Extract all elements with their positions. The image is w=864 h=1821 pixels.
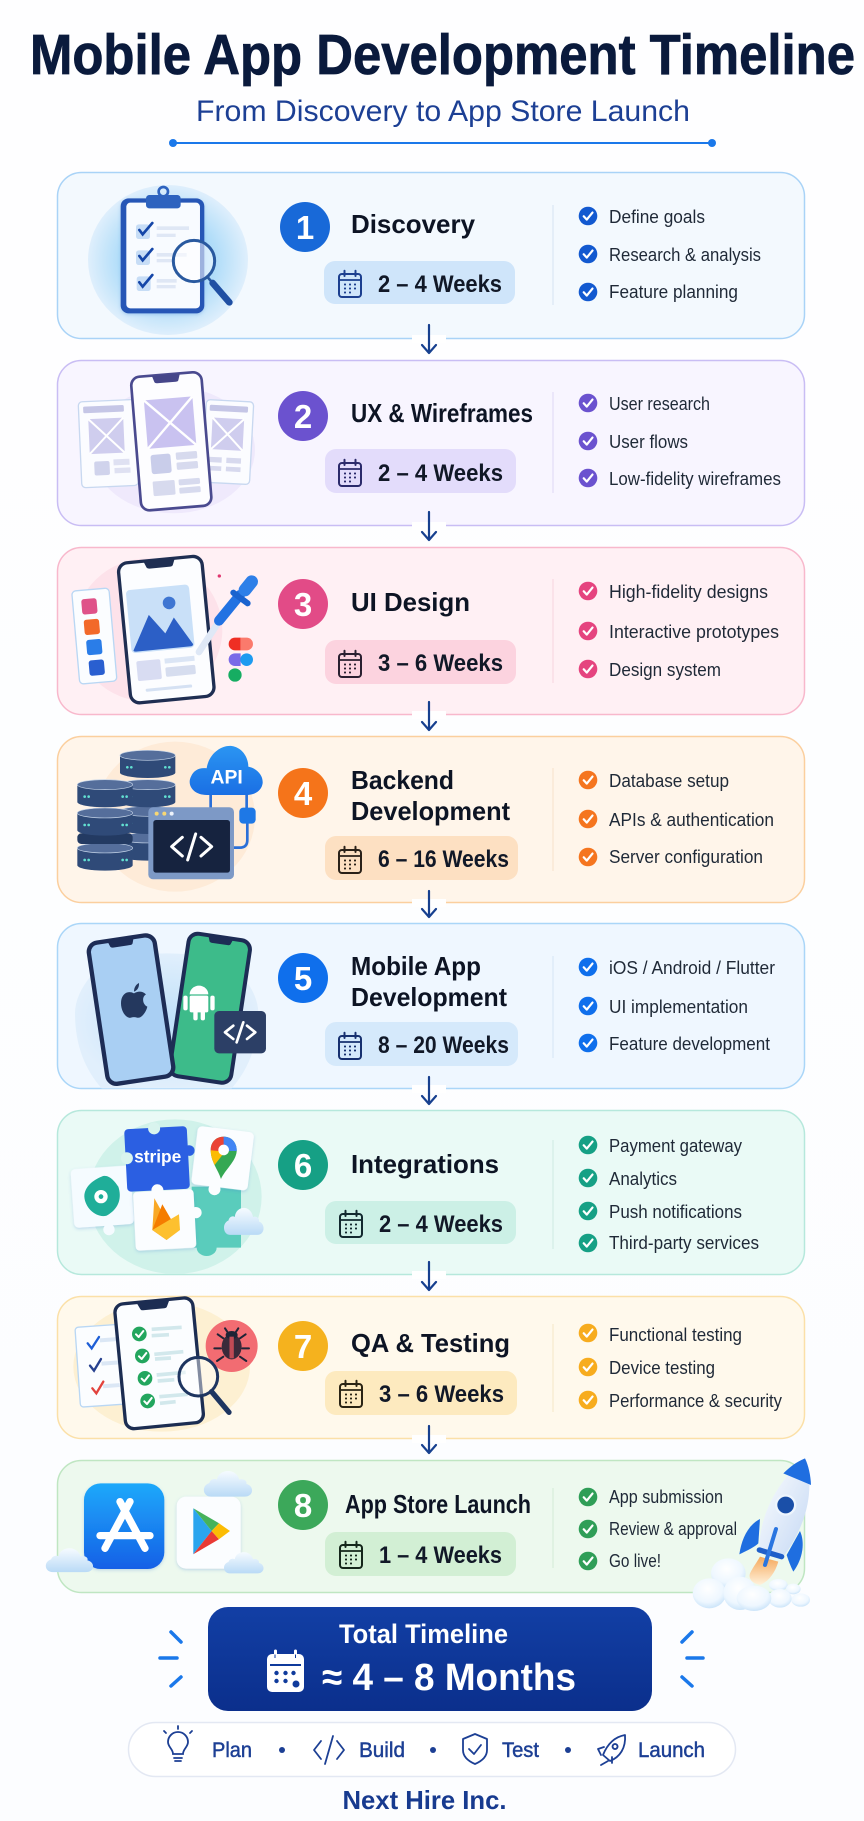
checklist: Go live! xyxy=(609,1551,661,1571)
arrow xyxy=(412,891,446,917)
panel: ux and wireframes xyxy=(58,360,804,526)
step title xyxy=(351,951,507,1012)
step title: Backend xyxy=(351,765,454,795)
panel: backend development xyxy=(58,736,804,902)
duration pill: 1 – 4 Weeks xyxy=(379,1542,502,1569)
panel: qa and testing xyxy=(58,1296,804,1438)
checklist: Performance & security xyxy=(609,1391,782,1411)
arrow xyxy=(412,1077,446,1104)
icon: wireframe phone and screens xyxy=(78,372,255,513)
label: launch: Launch xyxy=(638,1739,705,1762)
checklist: User flows xyxy=(609,432,688,452)
panel: ui design xyxy=(58,548,804,714)
checklist: App submission xyxy=(609,1487,723,1507)
duration pill: 2 – 4 Weeks xyxy=(378,460,503,487)
step title: UI Design xyxy=(351,587,470,617)
step number 7 xyxy=(278,1321,328,1371)
step title: Development xyxy=(351,982,507,1012)
checklist xyxy=(579,394,781,489)
company name: Next Hire Inc. xyxy=(342,1785,506,1815)
checklist xyxy=(579,207,761,302)
icon: qa phone and bug xyxy=(73,1297,258,1432)
duration pill xyxy=(325,1022,518,1066)
step number 8 xyxy=(278,1480,328,1530)
icon: white calendar xyxy=(267,1651,304,1692)
subtitle: From Discovery to App Store Launch xyxy=(196,95,690,128)
duration pill: 2 – 4 Weeks xyxy=(378,271,502,298)
checklist: Define goals xyxy=(609,207,705,227)
panel: integrations xyxy=(58,1110,804,1274)
arrow xyxy=(412,325,446,353)
step number 2: 2 xyxy=(294,398,312,435)
footer phases pill xyxy=(128,1722,736,1776)
icon: code xyxy=(314,1736,344,1764)
total timeline banner: ≈ 4 – 8 Months xyxy=(322,1657,576,1699)
icon: databases and api cloud xyxy=(77,742,263,892)
step number 1 xyxy=(280,202,330,252)
step title: Mobile App xyxy=(351,951,481,981)
checklist: Feature development xyxy=(609,1034,770,1054)
arrow xyxy=(412,1426,446,1453)
checklist: Review & approval xyxy=(609,1519,737,1539)
step number 6: 6 xyxy=(294,1147,312,1184)
step number 6 xyxy=(278,1140,328,1190)
step title: Integrations xyxy=(351,1149,499,1179)
step number 5 xyxy=(278,953,328,1003)
icon: lightbulb xyxy=(164,1726,192,1761)
decorative rays xyxy=(160,1632,703,1686)
step number 2 xyxy=(278,391,328,441)
checklist: Research & analysis xyxy=(609,245,761,265)
label: test: Test xyxy=(502,1739,539,1762)
step number 4 xyxy=(278,768,328,818)
step title: App Store Launch xyxy=(345,1489,531,1519)
icon: app store and play store xyxy=(46,1471,264,1573)
icon: ui design phone xyxy=(72,556,253,704)
step title: Development xyxy=(351,796,510,826)
duration pill xyxy=(324,261,515,304)
step number 1: 1 xyxy=(296,209,314,246)
checklist xyxy=(579,958,775,1054)
checklist: Analytics xyxy=(609,1169,677,1189)
checklist: Design system xyxy=(609,660,721,680)
checklist xyxy=(579,582,779,680)
checklist xyxy=(579,771,774,867)
icon: clipboard with magnifier xyxy=(88,185,248,335)
duration pill: 6 – 16 Weeks xyxy=(378,846,509,873)
arrow xyxy=(412,512,446,540)
checklist: Feature planning xyxy=(609,282,738,302)
checklist: Third-party services xyxy=(609,1233,759,1253)
step number 3 xyxy=(278,579,328,629)
label: plan: Plan xyxy=(212,1739,252,1762)
step number 3: 3 xyxy=(294,586,312,623)
duration pill xyxy=(325,449,516,493)
checklist: APIs & authentication xyxy=(609,810,774,830)
total timeline banner xyxy=(208,1607,652,1711)
checklist xyxy=(579,1136,759,1253)
duration pill xyxy=(325,1201,516,1244)
step title: UX & Wireframes xyxy=(351,398,533,428)
label: build: Build xyxy=(359,1739,405,1762)
checklist: iOS / Android / Flutter xyxy=(609,958,775,978)
icon: shield xyxy=(463,1734,487,1764)
duration pill xyxy=(325,1532,516,1576)
checklist: Push notifications xyxy=(609,1202,742,1222)
checklist: Interactive prototypes xyxy=(609,622,779,642)
step number 4: 4 xyxy=(294,775,313,812)
icon: integration puzzle pieces xyxy=(70,1119,264,1274)
panel: discovery xyxy=(58,172,804,338)
panel: app store launch xyxy=(46,1460,805,1592)
checklist: UI implementation xyxy=(609,997,748,1017)
icon: databases and api cloud: API xyxy=(211,767,243,788)
duration pill xyxy=(325,640,516,684)
icon: integration puzzle pieces: stripe xyxy=(134,1146,182,1166)
step number 8: 8 xyxy=(294,1487,312,1524)
checklist: Server configuration xyxy=(609,847,763,867)
duration pill: 2 – 4 Weeks xyxy=(379,1211,503,1238)
step number 5: 5 xyxy=(294,960,312,997)
arrow xyxy=(412,702,446,730)
checklist: Functional testing xyxy=(609,1325,742,1345)
title underline xyxy=(169,139,716,147)
duration pill: 3 – 6 Weeks xyxy=(378,650,503,677)
step title: QA & Testing xyxy=(351,1328,510,1358)
icon: ios and android phones xyxy=(75,932,266,1088)
checklist: Device testing xyxy=(609,1358,715,1378)
checklist: User research xyxy=(609,394,710,414)
arrow xyxy=(412,1262,446,1290)
checklist: Payment gateway xyxy=(609,1136,742,1156)
step title xyxy=(351,765,510,826)
step number 7: 7 xyxy=(294,1328,312,1365)
step title: Discovery xyxy=(351,209,476,239)
checklist xyxy=(579,1487,737,1571)
panel: mobile app development xyxy=(58,924,804,1088)
duration pill xyxy=(325,1371,517,1415)
duration pill: 3 – 6 Weeks xyxy=(379,1381,504,1408)
checklist: High-fidelity designs xyxy=(609,582,768,602)
checklist: Low-fidelity wireframes xyxy=(609,469,781,489)
duration pill xyxy=(325,836,518,880)
total timeline banner: Total Timeline xyxy=(339,1619,508,1649)
icon: rocket outline xyxy=(598,1735,625,1765)
duration pill: 8 – 20 Weeks xyxy=(378,1032,509,1059)
checklist xyxy=(579,1324,782,1411)
icon: rocket with clouds xyxy=(693,1458,811,1611)
checklist: Database setup xyxy=(609,771,729,791)
